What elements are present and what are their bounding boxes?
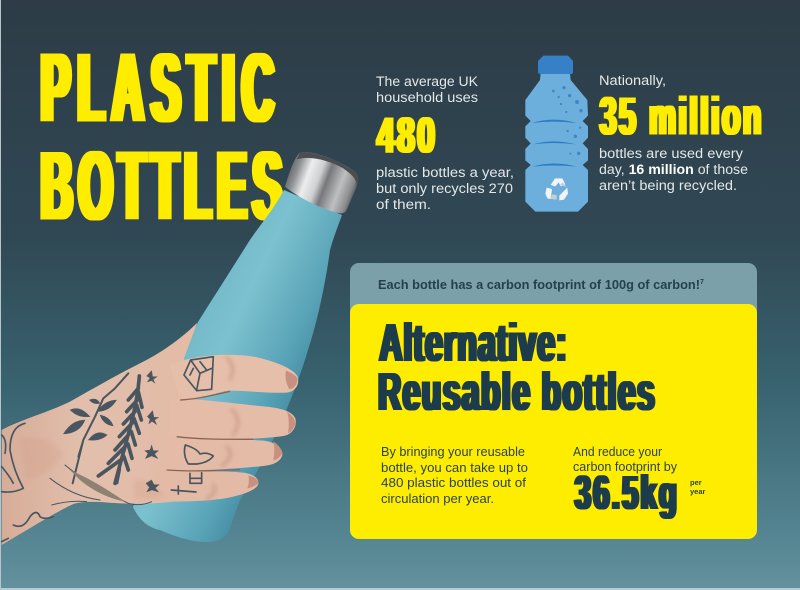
reusable bottle	[133, 152, 358, 542]
text block: take bottles out of circulation	[381, 445, 528, 506]
middle finger	[170, 398, 296, 439]
text block: take bottles out of circulation: circulation per year.	[381, 492, 494, 506]
text block: reduce carbon footprint: per	[690, 478, 702, 487]
text block: national stat: Nationally,	[599, 73, 666, 88]
finger creases and nails	[20, 357, 298, 500]
panel: carbon footprint note: 7	[700, 279, 704, 286]
panel: alternative reusable bottles	[350, 304, 757, 539]
feather	[98, 376, 142, 483]
text block: take bottles out of circulation: By bringing your reusable	[381, 445, 525, 459]
stars	[147, 371, 157, 383]
text block: household stat: 480	[377, 107, 437, 163]
panel: carbon footprint note: Each bottle has a carbon footprint of 100g of carbon!	[378, 277, 700, 292]
panel: carbon footprint note	[350, 263, 757, 323]
text block: reduce carbon footprint: year	[690, 487, 706, 496]
text block: national stat	[599, 73, 764, 193]
leaf sprig	[73, 373, 128, 483]
heading: alternative	[378, 313, 656, 422]
text block: national stat: 35 million	[600, 86, 764, 147]
pinky finger	[143, 470, 258, 502]
text block: reduce carbon footprint: carbon footprint by	[573, 460, 678, 474]
text block: household stat: but only recycles 270	[376, 181, 513, 196]
text block: national stat: aren’t being recycled.	[599, 178, 737, 193]
heading: alternative: Reusable bottles	[378, 362, 656, 422]
ring finger	[163, 437, 282, 471]
tattooed hand	[2, 323, 298, 545]
wrist lines	[50, 465, 152, 505]
title: plastic bottles: PLASTIC	[41, 34, 281, 143]
bottle cap	[285, 152, 358, 213]
icon: plastic bottle with recycling symbol	[525, 56, 588, 212]
text block: household stat: of them.	[376, 197, 431, 212]
heading: alternative: Alternative:	[379, 313, 568, 373]
text block: national stat: bottles are used every	[599, 146, 743, 161]
index finger	[170, 355, 298, 400]
text block: take bottles out of circulation: 480 plastic bottles out of	[381, 476, 527, 490]
text block: reduce carbon footprint: And reduce your	[573, 445, 662, 459]
text block: reduce carbon footprint: 36.5kg	[575, 467, 679, 520]
text block: household stat: The average UK	[376, 74, 478, 89]
text block: household stat: household uses	[376, 90, 478, 105]
text block: take bottles out of circulation: bottle, you can take up to	[381, 461, 528, 475]
title: plastic bottles	[41, 34, 288, 241]
title: plastic bottles: BOTTLES	[41, 132, 288, 241]
text block: national stat: day, 16 million of those	[599, 162, 748, 177]
text block: household stat	[376, 74, 514, 212]
text block: reduce carbon footprint	[573, 445, 706, 520]
knuckle tattoos	[184, 357, 213, 391]
back of hand and arm	[2, 323, 197, 545]
tattoos	[2, 357, 213, 542]
text block: household stat: plastic bottles a year,	[376, 165, 514, 180]
